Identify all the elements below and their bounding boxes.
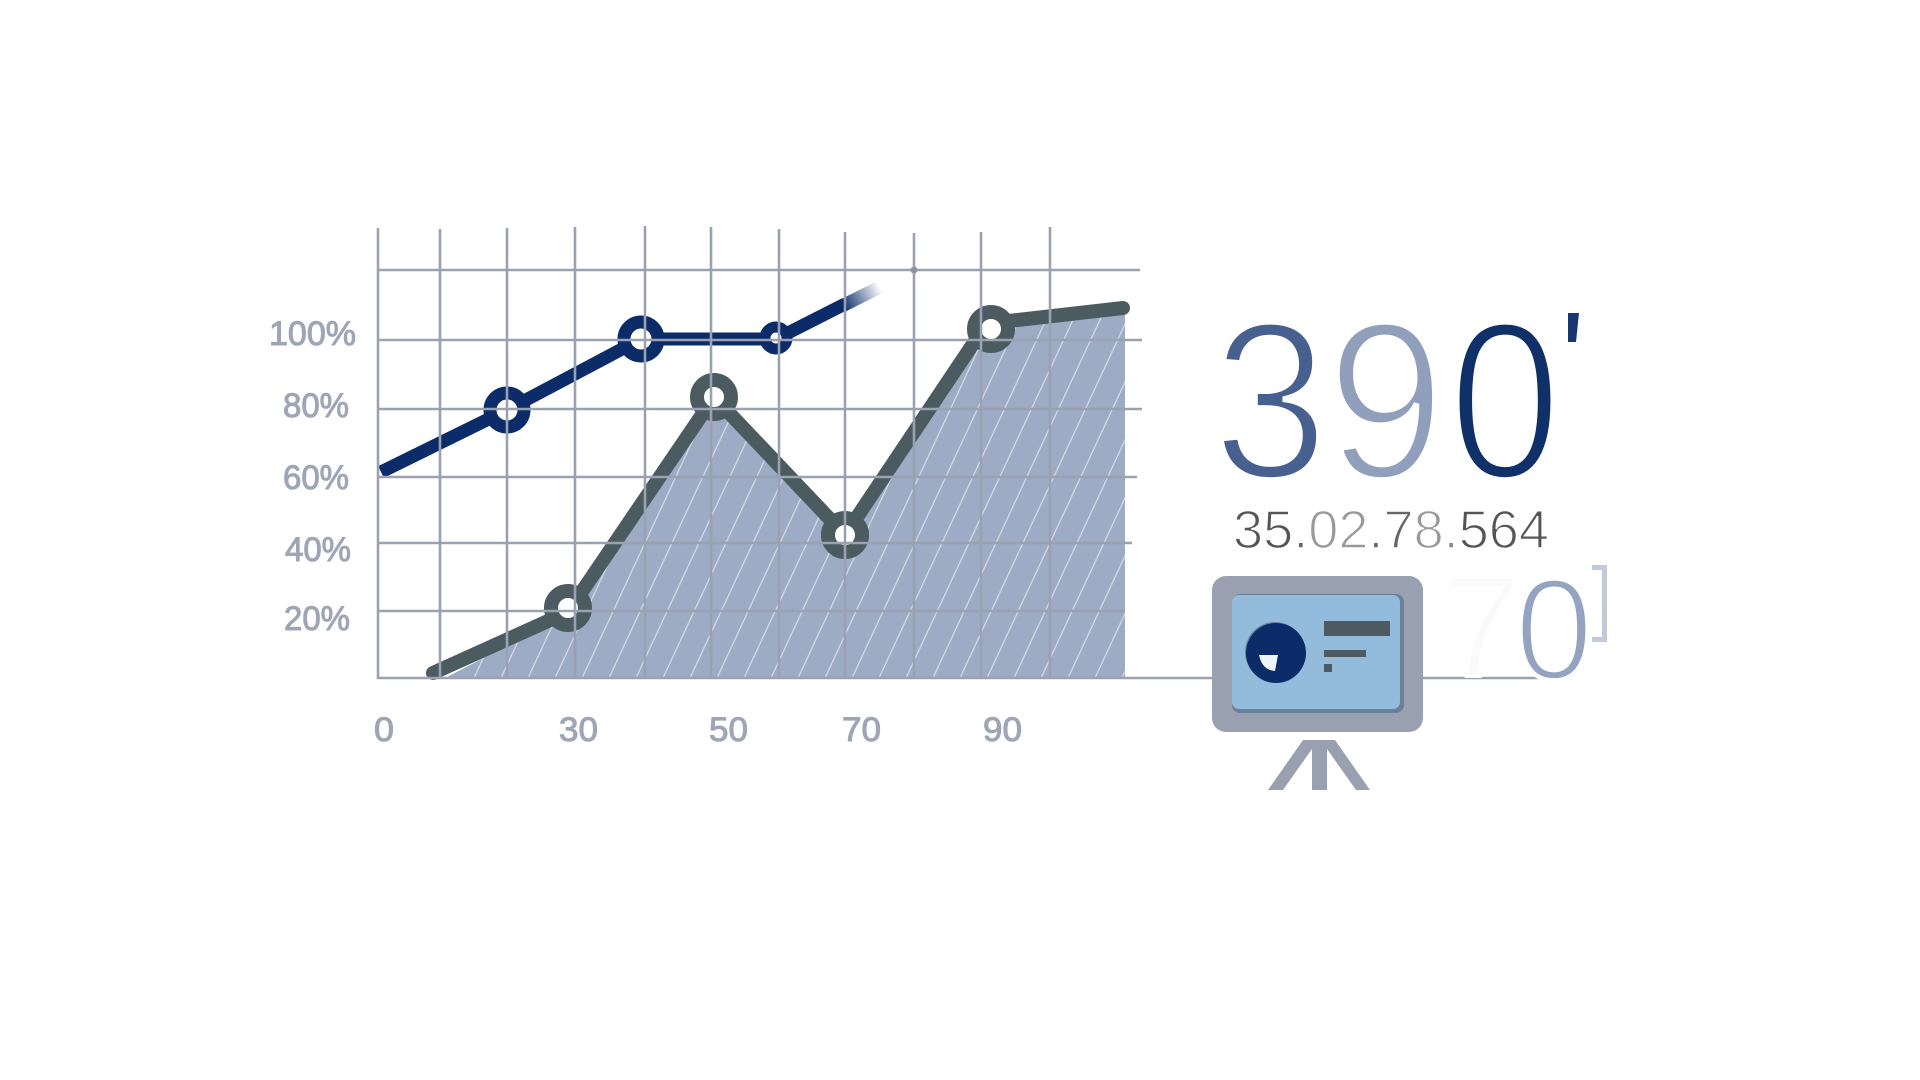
icon: presentation screen xyxy=(1212,576,1423,790)
prime mark xyxy=(1568,313,1579,342)
y axis labels xyxy=(269,315,356,638)
x axis labels: 50 xyxy=(709,711,748,749)
monitor frame xyxy=(1212,576,1423,732)
big number 390': 9 xyxy=(1327,276,1445,526)
x axis labels: 70 xyxy=(842,711,881,749)
grid xyxy=(378,226,1539,679)
big number 390': 0 xyxy=(1449,276,1561,526)
x axis labels xyxy=(374,711,1022,749)
line series: dark grey xyxy=(433,308,1123,673)
monitor stand xyxy=(1268,740,1370,790)
y axis labels: 40% xyxy=(285,531,351,569)
area chart fill xyxy=(445,310,1125,678)
x axis labels: 90 xyxy=(983,711,1022,749)
y axis labels: 100% xyxy=(269,315,356,353)
faded number 70 with bracket xyxy=(1441,546,1607,710)
line series: navy xyxy=(381,287,880,472)
secondary number: 35.02.78.564 xyxy=(1233,500,1549,560)
y axis labels: 20% xyxy=(284,600,350,638)
big number 390' xyxy=(1213,276,1561,526)
faded number 70 with bracket: 0 xyxy=(1515,549,1593,710)
x axis labels: 30 xyxy=(559,711,598,749)
x axis labels: 0 xyxy=(374,711,394,749)
big number 390': 3 xyxy=(1213,276,1328,526)
y axis labels: 80% xyxy=(283,387,349,425)
y axis labels: 60% xyxy=(283,459,349,497)
faded number 70 with bracket: 7 xyxy=(1441,546,1521,707)
